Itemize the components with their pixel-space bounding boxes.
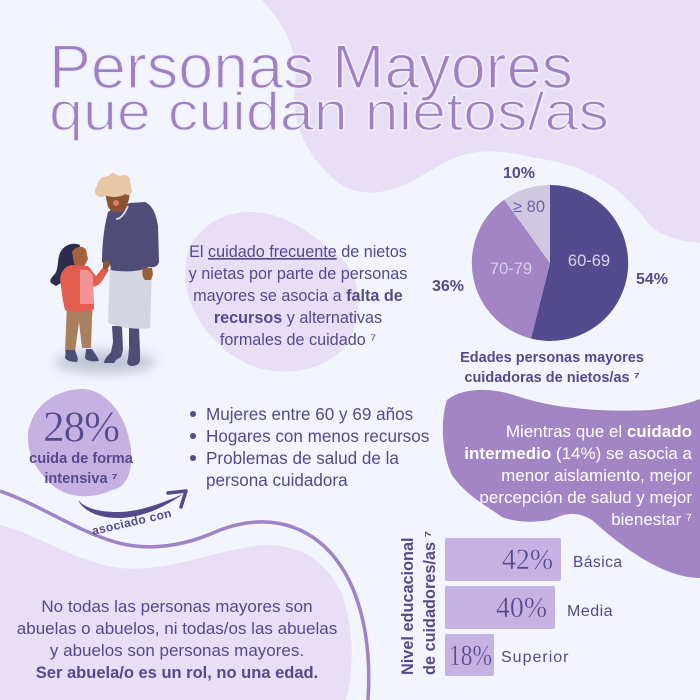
- background curve: bottom left: [0, 491, 369, 700]
- bar: Básica: 42%: [502, 543, 553, 576]
- text block: intermediate care: intermedio (14%) se asocia a: [464, 444, 693, 463]
- stat: 28% blob: 28%: [43, 404, 119, 451]
- pie chart: ages: [472, 185, 628, 341]
- panel: central blob: [185, 212, 358, 372]
- pie labels: [432, 165, 668, 295]
- title: que cuidan nietos/as: [49, 82, 609, 142]
- bar: Media: Media: [567, 603, 613, 620]
- text block: frequent care: mayores se asocia a falta de: [193, 287, 403, 305]
- text block: not all older people are grandparents: abuelas o abuelos, ni todas/os las abuelas: [17, 619, 337, 638]
- illustration: grandmother and granddaughter: [50, 173, 159, 373]
- text block: frequent care: formales de cuidado ⁷: [220, 331, 376, 349]
- axis title: de cuidadores/as ⁷: [421, 530, 439, 675]
- grandmother: [95, 173, 159, 366]
- arrow: asociado con: [78, 491, 186, 538]
- bar: Superior: [445, 634, 569, 676]
- list: associated factors: persona cuidadora: [206, 471, 348, 490]
- text block: intermediate care: Mientras que el cuidado: [506, 422, 692, 441]
- slice: 60-69: [531, 185, 628, 341]
- text block: not all older people are grandparents: [17, 597, 337, 682]
- stat: 28% blob: intensiva ⁷: [44, 471, 118, 487]
- text block: intermediate care: bienestar ⁷: [611, 510, 692, 529]
- girl: [50, 244, 110, 362]
- text block: not all older people are grandparents: No todas las personas mayores son: [41, 597, 313, 616]
- ground shadow: [55, 351, 155, 373]
- text block: frequent care: El cuidado frecuente de nietos: [189, 243, 407, 261]
- pie chart: ages: 70-79: [490, 260, 532, 278]
- pie labels: 10%: [503, 165, 535, 182]
- list: associated factors: Problemas de salud de la: [206, 449, 399, 468]
- pie labels: 54%: [636, 271, 668, 288]
- pie caption: cuidadoras de nietos/as ⁷: [464, 370, 640, 386]
- title: [49, 33, 609, 142]
- text block: frequent care: recursos y alternativas: [214, 309, 382, 327]
- text block: not all older people are grandparents: Ser abuela/o es un rol, no una edad.: [36, 664, 318, 682]
- list: associated factors: [190, 405, 429, 490]
- bar: Básica: [445, 538, 623, 581]
- bar chart: education: [399, 530, 623, 676]
- pie caption: [460, 350, 644, 386]
- slice: 80+: [504, 185, 550, 263]
- panel: right purple blob: [443, 390, 700, 578]
- bar: Superior: Superior: [501, 649, 569, 666]
- stat: 28% blob: [28, 389, 134, 496]
- list: associated factors: Hogares con menos recursos: [206, 427, 429, 446]
- text block: intermediate care: [464, 422, 693, 529]
- pie chart: ages: ≥ 80: [513, 198, 545, 216]
- bar: Superior: 18%: [449, 639, 492, 672]
- background blob: top right: [262, 0, 700, 243]
- background blob: bottom left: [0, 525, 352, 700]
- text block: intermediate care: percepción de salud y mejor: [479, 488, 692, 507]
- stat: 28% blob: cuida de forma: [29, 451, 134, 467]
- arrow: asociado con: asociado con: [91, 506, 173, 538]
- slice: 70-79: [472, 200, 550, 339]
- list: associated factors: Mujeres entre 60 y 69 años: [206, 405, 413, 424]
- axis title: [399, 530, 439, 675]
- bar: Básica: Básica: [573, 554, 623, 571]
- text block: not all older people are grandparents: y abuelos son personas mayores.: [50, 641, 304, 660]
- pie caption: Edades personas mayores: [460, 350, 644, 366]
- axis title: Nivel educacional: [399, 537, 417, 675]
- bar: Media: [445, 586, 613, 629]
- pie labels: 36%: [432, 278, 464, 295]
- text block: frequent care: [189, 243, 407, 349]
- text block: intermediate care: menor aislamiento, mejor: [501, 466, 692, 485]
- bar: Media: 40%: [496, 591, 547, 624]
- text block: frequent care: y nietas por parte de personas: [189, 265, 407, 283]
- title: Personas Mayores: [49, 33, 573, 102]
- pie chart: ages: 60-69: [568, 252, 610, 270]
